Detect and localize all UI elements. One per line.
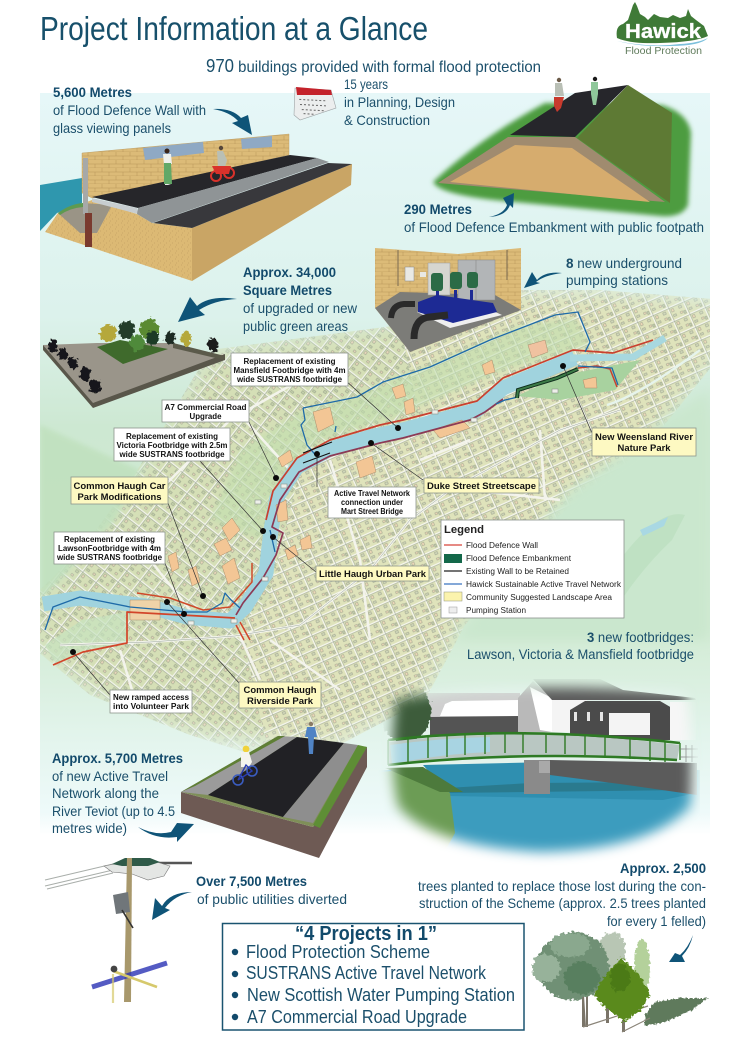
project list: Flood Protection Scheme [246, 942, 430, 962]
pumping station markers [188, 389, 558, 625]
flood defence wall (red) [53, 340, 653, 665]
bullets [232, 949, 238, 1020]
project list: SUSTRANS Active Travel Network [246, 963, 487, 983]
legend: active travel: Hawick Sustainable Active Travel Network [466, 580, 622, 589]
logo: Hawick Flood Protection [617, 2, 708, 57]
text: active travel network: Approx. 5,700 Metres [52, 750, 183, 766]
label: Victoria footbridge [114, 428, 230, 461]
label: Duke Street Streetscape [424, 478, 539, 493]
text: flood defence wall [53, 84, 206, 136]
text: active travel network: River Teviot (up to 4.5 [52, 803, 175, 819]
text: green areas: of upgraded or new [243, 300, 358, 316]
text: 15 years [344, 76, 455, 128]
text: embankment [404, 201, 704, 235]
arrow: to wall [213, 109, 252, 135]
illustration: utility pole [45, 858, 192, 1003]
text: flood defence wall: 5,600 Metres [53, 84, 132, 100]
legend: embankment: Flood Defence Embankment [466, 554, 572, 563]
arrow: to embankment [489, 193, 514, 217]
label: Active Travel connection: Active Travel Network [334, 489, 410, 498]
people on wall [163, 146, 234, 185]
legend: pumping station: Pumping Station [466, 606, 526, 615]
map of Hawick [30, 290, 725, 760]
title: Project Information at a Glance [40, 10, 428, 47]
green fields [40, 318, 709, 664]
panel heading: “4 Projects in 1” [295, 923, 437, 945]
text: active travel network: metres wide) [52, 820, 127, 836]
arrow: to pump room [524, 272, 562, 288]
text: flood defence wall: of Flood Defence Wall with [53, 102, 206, 118]
text: green areas: Approx. 34,000 [243, 264, 336, 280]
illustration: active travel path [181, 722, 367, 858]
people on embankment [554, 77, 598, 112]
label: Mansfield footbridge [231, 353, 348, 386]
label: Mansfield footbridge: Mansfield Footbridge with 4m [234, 366, 346, 375]
label: ramped access Volunteer Park [110, 690, 192, 713]
town streets east of river [240, 290, 725, 760]
legend: landscape area: Community Suggested Landscape Area [466, 593, 613, 602]
icon: calendar [294, 87, 336, 120]
text: pumping stations [566, 255, 682, 288]
text: public utilities [196, 873, 347, 907]
label: Victoria footbridge: wide SUSTRANS footbridge [119, 450, 225, 459]
project list: New Scottish Water Pumping Station [247, 985, 515, 1005]
illustration: footbridge scene [384, 679, 700, 862]
logo: Hawick Flood Protection: Hawick [625, 21, 702, 43]
project list [246, 942, 515, 1027]
text: embankment: 290 Metres [404, 201, 472, 217]
active travel network (blue) [45, 312, 618, 630]
label: Victoria footbridge: Victoria Footbridge with 2.5m [116, 441, 228, 450]
text: embankment: of Flood Defence Embankment with public footpath [404, 219, 704, 235]
illustration: embankment [433, 77, 691, 216]
label: New Weensland River Nature Park: Nature Park [618, 443, 671, 454]
panel: 4 Projects in 1 [222, 923, 524, 1030]
label: Common Haugh Riverside Park: Riverside Park [247, 696, 314, 707]
label: Common Haugh Riverside Park [239, 682, 321, 708]
label: Mansfield footbridge: Replacement of existing [244, 357, 336, 366]
text: 15 years: 15 years [344, 76, 388, 92]
project list: A7 Commercial Road Upgrade [247, 1007, 467, 1027]
text: public utilities: of public utilities diverted [197, 891, 347, 907]
label: New Weensland River Nature Park: New Weensland River [595, 432, 693, 443]
label: Victoria footbridge: Replacement of existing [126, 432, 218, 441]
legend [441, 520, 624, 618]
legend: existing wall: Existing Wall to be Retained [466, 567, 569, 576]
logo: Hawick Flood Protection: Flood Protection [625, 46, 702, 57]
text: active travel network: of new Active Travel [52, 768, 168, 784]
label: Lawson footbridge [54, 532, 165, 564]
label: Duke Street Streetscape: Duke Street Streetscape [427, 481, 536, 492]
legend: Legend [444, 524, 484, 536]
orange buildings [130, 340, 597, 620]
label: Active Travel connection [328, 487, 416, 518]
text: public utilities: Over 7,500 Metres [196, 873, 307, 889]
river Teviot [43, 358, 575, 621]
text: active travel network [52, 750, 183, 836]
grass base [433, 103, 691, 216]
main roads [60, 380, 620, 700]
text: green areas: public green areas [243, 318, 348, 334]
illustration: trees [532, 932, 708, 1032]
text: flood defence wall: glass viewing panels [53, 120, 171, 136]
text: footbridges: 3 new footbridges: [587, 629, 694, 645]
foliage [532, 932, 650, 1022]
label: Active Travel connection: Mart Street Bridge [341, 507, 403, 516]
illustration: flood defence wall [40, 134, 352, 281]
text: trees planted [418, 860, 706, 929]
background panel [40, 93, 710, 835]
illustration: pump room [375, 248, 521, 352]
existing wall (black) [303, 442, 332, 463]
arrow: to green area [178, 297, 237, 322]
text: pumping stations: 8 new underground [566, 255, 682, 271]
illustration: public green area [43, 319, 225, 408]
text: trees planted: for every 1 felled) [607, 913, 706, 929]
label: Little Haugh Urban Park: Little Haugh Urban Park [319, 569, 427, 580]
label: A7 road upgrade: Upgrade [190, 412, 222, 421]
legend: wall: Flood Defence Wall [466, 541, 538, 550]
label: Lawson footbridge: LawsonFootbridge with 4m [58, 544, 161, 553]
text: trees planted: struction of the Scheme (approx. 2.5 trees planted [419, 895, 706, 911]
label: ramped access Volunteer Park: into Volunteer Park [113, 702, 190, 711]
label: Active Travel connection: connection under [341, 498, 403, 507]
embankment core [517, 369, 578, 398]
text: active travel network: Network along the [52, 785, 159, 801]
text: green areas: Square Metres [243, 282, 332, 298]
bridge [388, 732, 698, 766]
text: footbridges: Lawson, Victoria & Mansfield footbridge [467, 646, 694, 662]
label: Lawson footbridge: wide SUSTRANS footbridge [56, 553, 163, 562]
bank park [517, 360, 640, 400]
label: New Weensland River Nature Park [592, 428, 696, 456]
text: green areas [243, 264, 358, 334]
label: A7 road upgrade: A7 Commercial Road [164, 403, 247, 412]
text: footbridges [467, 629, 694, 662]
label: Common Haugh Car Park [71, 477, 168, 504]
headline: 970 buildings: 970 buildings provided with formal flood protection [206, 56, 541, 76]
text: 15 years: in Planning, Design [344, 94, 455, 110]
town streets west of river [30, 325, 420, 760]
label: Common Haugh Car Park: Park Modifications [78, 492, 162, 503]
text: trees planted: trees planted to replace those lost during the con- [418, 878, 706, 894]
arrow: to path model [138, 823, 194, 842]
arrow: to pole [152, 892, 192, 920]
label: Common Haugh Car Park: Common Haugh Car [74, 481, 166, 492]
cyclist and walker [233, 722, 317, 785]
label: Mansfield footbridge: wide SUSTRANS footbridge [236, 375, 343, 384]
leader lines and markers [70, 363, 592, 695]
arrow: to trees [669, 935, 693, 962]
label: ramped access Volunteer Park: New ramped access [113, 693, 190, 702]
flood defence embankment [517, 369, 578, 398]
text: pumping stations: pumping stations [566, 272, 668, 288]
label: Common Haugh Riverside Park: Common Haugh [244, 685, 317, 696]
park trees [48, 319, 218, 393]
label: Lawson footbridge: Replacement of existing [64, 535, 155, 544]
text: trees planted: Approx. 2,500 [620, 860, 706, 876]
text: 15 years: & Construction [344, 112, 430, 128]
label: A7 road upgrade [162, 400, 249, 422]
